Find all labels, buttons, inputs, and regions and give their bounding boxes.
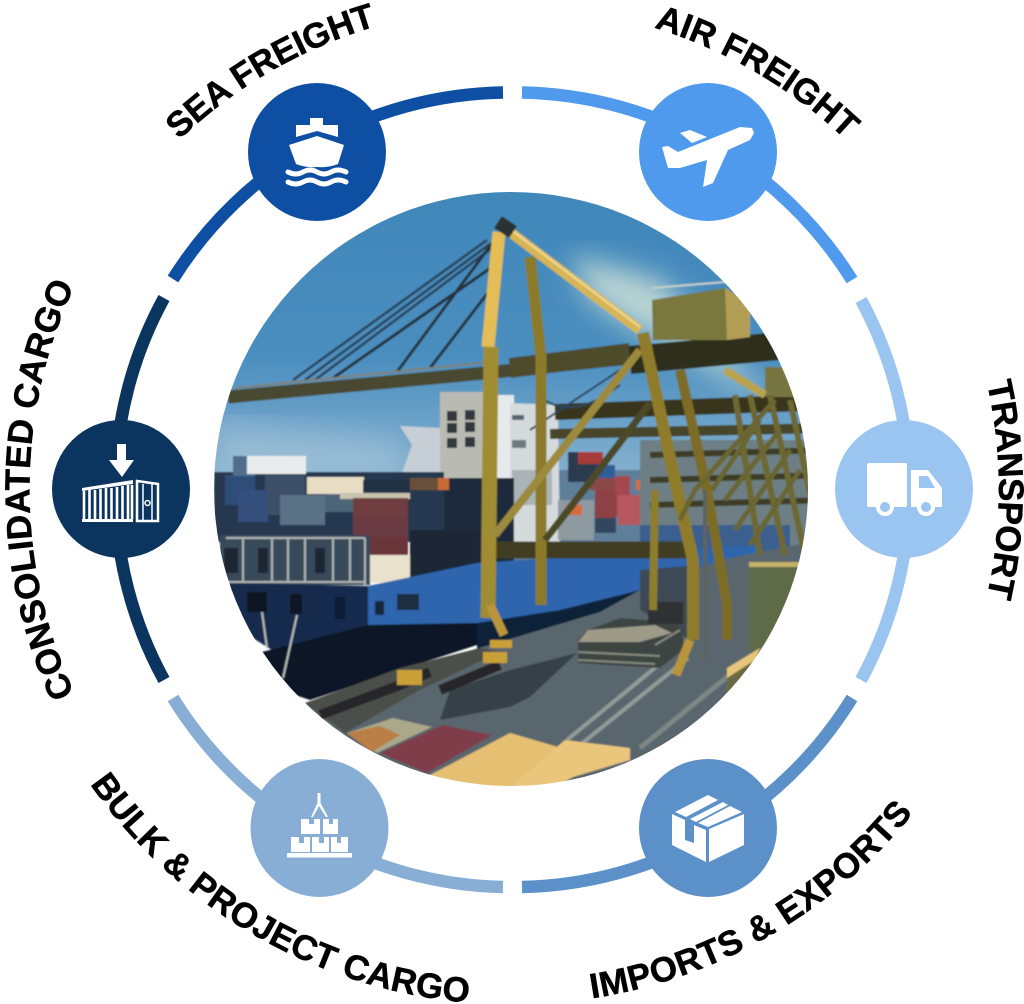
dock details <box>305 565 760 748</box>
node: sea freight <box>248 83 386 221</box>
ring segment: bulk and project cargo <box>173 698 503 887</box>
node: bulk and project cargo <box>250 759 388 897</box>
icon: truck <box>867 463 942 516</box>
cargo in foreground <box>347 718 630 795</box>
container stacks on ship <box>214 456 514 590</box>
stacked containers on right <box>726 561 799 693</box>
node: transport <box>835 420 973 558</box>
label: bulk and project cargo: BULK & PROJECT CARGO <box>91 771 469 1002</box>
background containers <box>557 439 808 552</box>
quay crane: stays and boom <box>228 240 830 550</box>
concrete slab stacks <box>578 602 683 668</box>
crane machinery house <box>652 282 795 397</box>
crane frame: masts and legs <box>488 222 820 675</box>
icon: cardboard box <box>672 795 744 862</box>
icon: container with down arrow <box>82 444 158 522</box>
ring segment: sea freight <box>173 92 503 279</box>
node: imports and exports <box>639 759 777 897</box>
white ship superstructure <box>400 392 560 542</box>
ship hull <box>228 545 760 700</box>
label: sea freight: SEA FREIGHT <box>166 2 370 136</box>
label: air freight: AIR FREIGHT <box>654 8 862 134</box>
ring segment: transport <box>861 300 909 680</box>
icon: airplane <box>662 127 754 187</box>
ring segment: air freight <box>522 92 852 280</box>
central photo: container port with cranes <box>205 185 830 800</box>
label: imports and exports: IMPORTS & EXPORTS <box>590 801 910 998</box>
icon: ship <box>288 118 346 184</box>
ring segment: consolidated cargo <box>115 298 164 680</box>
node: consolidated cargo <box>52 420 190 558</box>
node: air freight <box>639 83 777 221</box>
dock surface <box>304 544 802 786</box>
icon: crane hook with pallet of boxes <box>287 793 352 858</box>
ring segment: imports and exports <box>522 698 852 887</box>
yellow trucks <box>397 640 512 685</box>
label: consolidated cargo: CONSOLIDATED CARGO <box>5 280 71 699</box>
